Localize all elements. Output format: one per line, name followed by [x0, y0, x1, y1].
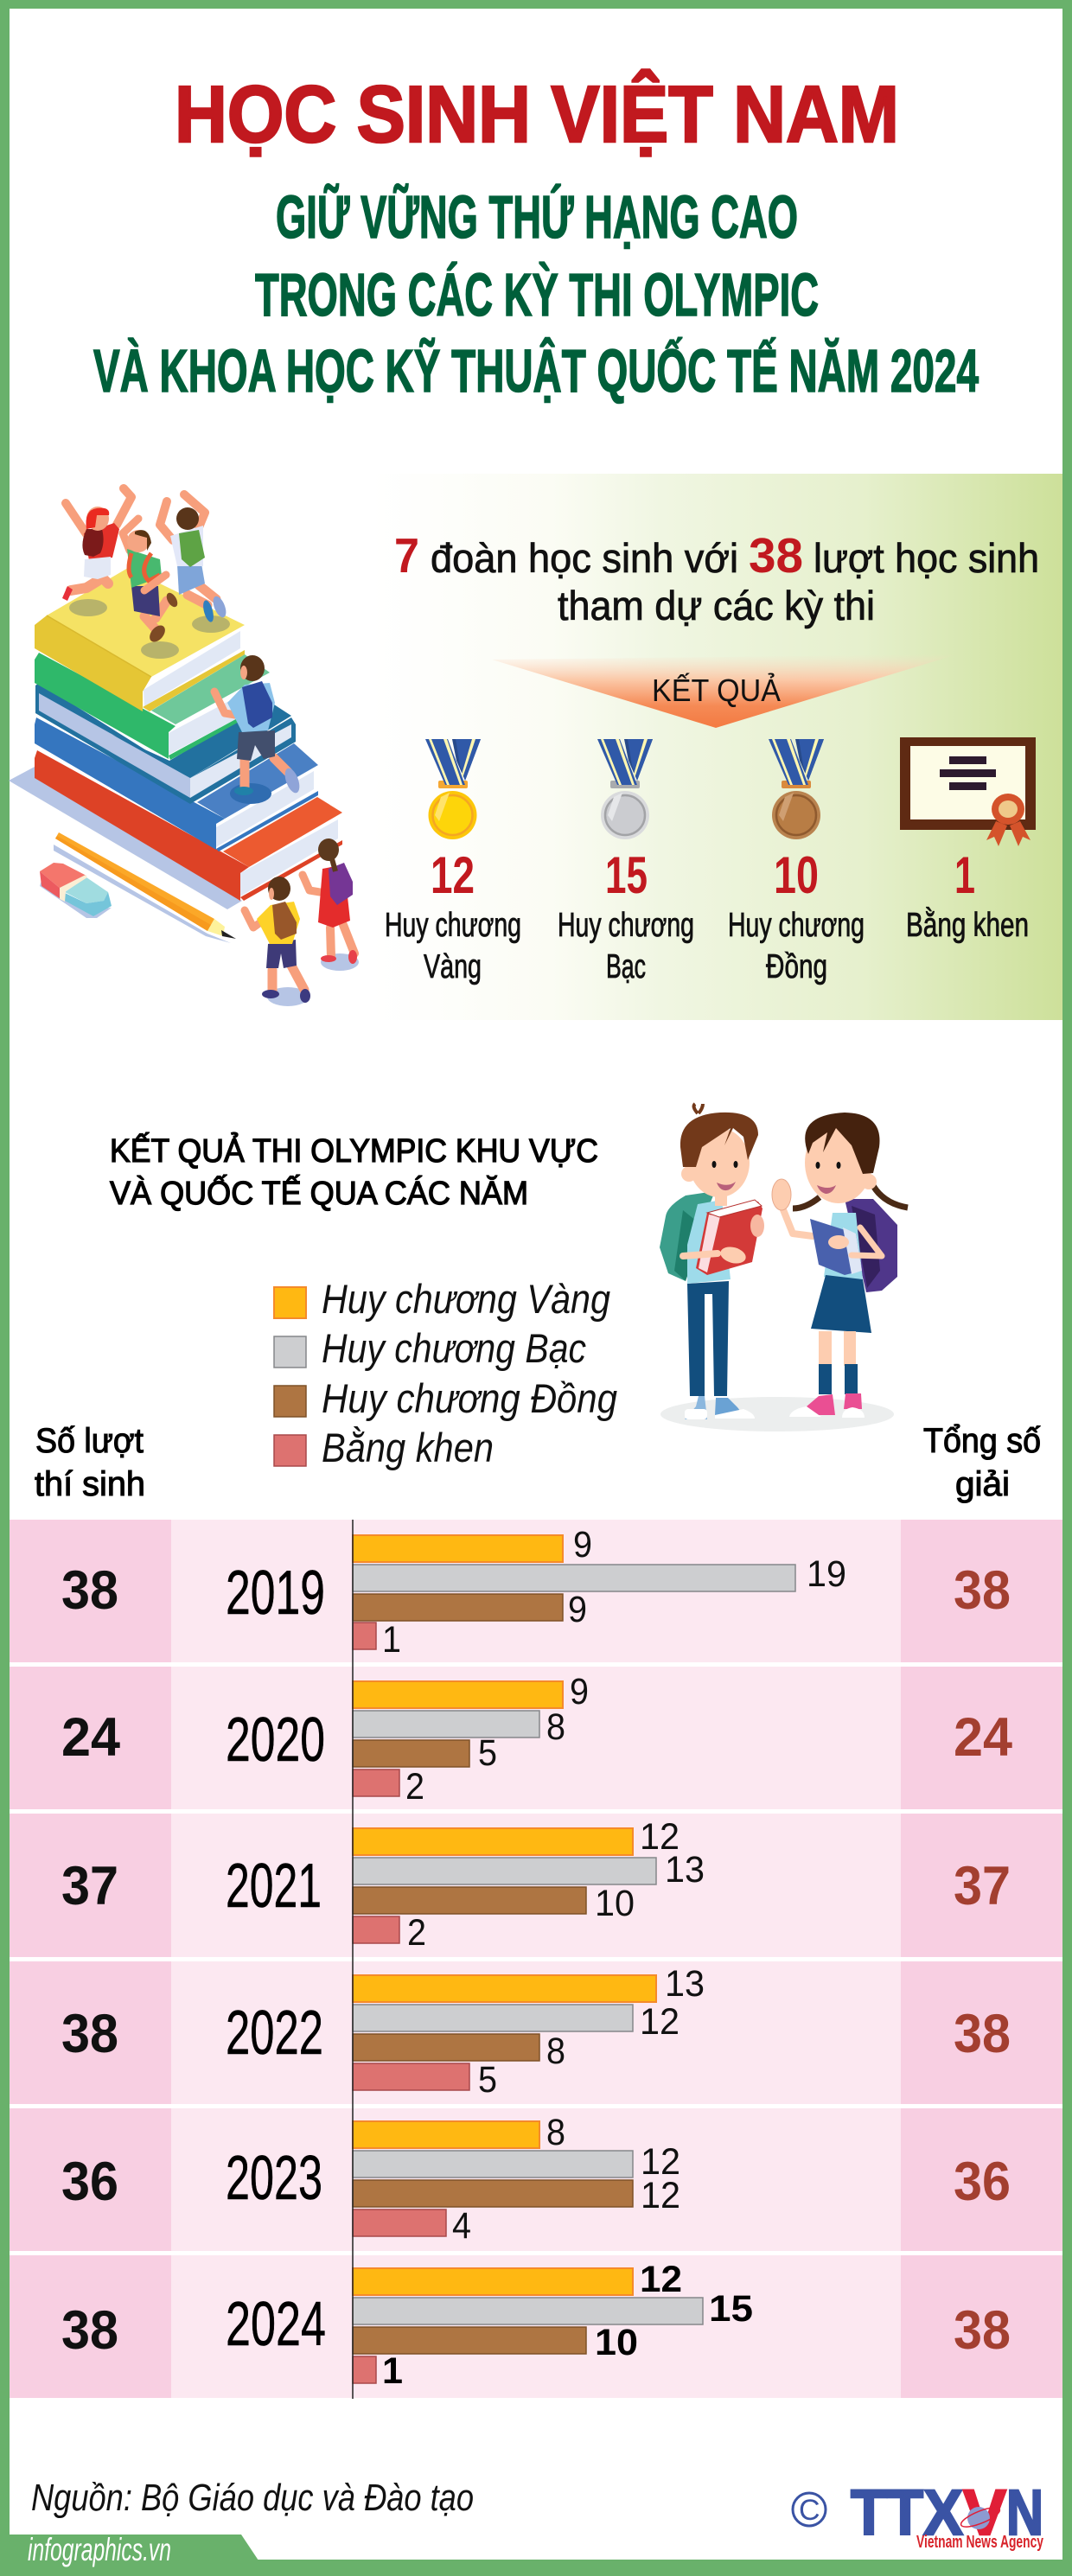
- legend: Huy chương Đồng: [322, 1375, 617, 1421]
- jump shadows: [69, 599, 230, 659]
- red book: [35, 750, 342, 901]
- column heading: participants: [35, 1422, 145, 1503]
- table row 2019: 9: [573, 1524, 592, 1565]
- table row 2024: 2024: [226, 2290, 326, 2359]
- column heading: total awards: Tổng số: [923, 1422, 1041, 1460]
- section heading: KẾT QUẢ THI OLYMPIC KHU VỰC: [110, 1132, 598, 1170]
- section heading: VÀ QUỐC TẾ QUA CÁC NĂM: [110, 1173, 528, 1212]
- table row 2024: 10: [595, 2322, 638, 2363]
- table row 2019: 19: [807, 1553, 846, 1595]
- table row 2021: [10, 1814, 1062, 1957]
- table row 2024: 12: [640, 2259, 682, 2300]
- copyright icon: [793, 2493, 826, 2527]
- gold count: 12: [431, 846, 475, 904]
- table row 2021: 13: [665, 1849, 705, 1891]
- shadow under books: [9, 767, 242, 909]
- gold count: Huy chương: [385, 907, 521, 944]
- illustration: two students talking: [660, 1104, 908, 1431]
- icon: certificate: [900, 737, 1036, 846]
- panel: results summary background: [372, 474, 1062, 1020]
- ground shadow: [660, 1397, 894, 1431]
- headline: delegations and students: 7: [394, 528, 419, 583]
- blue book: [35, 717, 318, 851]
- table row 2022: 38: [954, 2004, 1011, 2064]
- table row 2020: 8: [546, 1706, 565, 1748]
- section heading: [110, 1132, 598, 1212]
- table row 2019: 1: [382, 1619, 401, 1661]
- table row 2022: 2022: [226, 1999, 323, 2068]
- gold count: [385, 846, 521, 985]
- table row 2022: [10, 1961, 1062, 2104]
- headline: delegations and students: [394, 528, 1039, 628]
- subtitle: GIỮ VỮNG THỨ HẠNG CAO: [276, 183, 798, 251]
- table row 2019: 38: [61, 1560, 118, 1621]
- silver count: 15: [605, 846, 648, 904]
- website tab: infographics.vn: [28, 2532, 171, 2567]
- silver count: Bạc: [606, 948, 646, 985]
- table row 2024: 38: [61, 2300, 118, 2361]
- logo: TTXVN: V: [963, 2477, 1006, 2548]
- logo: TTXVN: TTX: [851, 2477, 963, 2548]
- illustration: book stack with students: [9, 488, 359, 1006]
- table row 2020: [10, 1667, 1062, 1809]
- table row 2022: 5: [478, 2059, 497, 2101]
- table row 2022: 12: [640, 2001, 680, 2043]
- table row 2020: 9: [570, 1671, 589, 1712]
- green book: [35, 653, 270, 760]
- results banner: [492, 654, 957, 728]
- table row 2020: 2: [405, 1766, 424, 1808]
- icon: bronze medal: [769, 739, 824, 839]
- headline: delegations and students: đoàn học sinh với: [431, 535, 738, 581]
- table row 2020: 2020: [226, 1706, 325, 1775]
- student in red dress: [303, 838, 359, 971]
- table row 2024: 1: [382, 2350, 403, 2392]
- table row 2021: 10: [595, 1883, 635, 1924]
- bronze count: 10: [774, 846, 819, 904]
- table row 2023: 12: [641, 2141, 680, 2183]
- logo: TTXVN: N: [1006, 2477, 1043, 2548]
- logo: TTXVN: [851, 2477, 1044, 2552]
- icon: gold medal: [425, 739, 481, 839]
- table row 2021: 37: [954, 1856, 1011, 1916]
- headline: delegations and students: tham dự các kỳ thi: [558, 583, 875, 628]
- legend: [274, 1276, 617, 1470]
- table row 2020: 24: [61, 1707, 120, 1768]
- table row 2023: 12: [641, 2175, 680, 2216]
- legend: Huy chương Bạc: [322, 1325, 586, 1371]
- column heading: participants: Số lượt: [35, 1422, 144, 1460]
- table row 2022: 8: [546, 2031, 565, 2072]
- certificate count: [906, 846, 1029, 944]
- table row 2021: 12: [640, 1816, 680, 1858]
- table row 2020: 24: [954, 1707, 1012, 1768]
- eraser: [40, 863, 112, 918]
- teal book: [35, 683, 296, 804]
- chart axis: [352, 1520, 354, 2399]
- legend: Bằng khen: [322, 1425, 494, 1470]
- table row 2019: 38: [954, 1560, 1011, 1621]
- table row 2022: 38: [61, 2004, 118, 2064]
- table row 2019: [10, 1520, 1062, 1662]
- column heading: participants: thí sinh: [35, 1465, 145, 1503]
- results banner: KẾT QUẢ: [652, 673, 781, 708]
- climbing student with blue backpack: [214, 655, 303, 804]
- column heading: total awards: giải: [955, 1465, 1010, 1503]
- headline: delegations and students: 38: [749, 528, 803, 583]
- table row 2023: 8: [546, 2112, 565, 2153]
- headline: delegations and students: lượt học sinh: [814, 535, 1039, 581]
- pencil: [54, 832, 236, 943]
- table row 2023: 36: [61, 2152, 118, 2212]
- source note: Nguồn: Bộ Giáo dục và Đào tạo: [31, 2477, 474, 2519]
- table row 2021: 37: [61, 1856, 118, 1916]
- silver count: [558, 846, 694, 985]
- student with brown backpack: [245, 877, 310, 1006]
- icon: silver medal: [597, 739, 653, 839]
- student with green backpack: [160, 494, 228, 623]
- certificate count: Bằng khen: [906, 907, 1029, 944]
- table row 2019: 9: [568, 1589, 587, 1630]
- yellow book: [35, 568, 245, 711]
- table row 2024: 15: [709, 2288, 753, 2330]
- table row 2021: 2: [407, 1912, 426, 1954]
- bronze count: Huy chương: [728, 907, 865, 944]
- bronze count: [728, 846, 865, 985]
- boy: [660, 1104, 764, 1419]
- certificate count: 1: [954, 846, 975, 904]
- column heading: total awards: [923, 1422, 1041, 1503]
- girl: [772, 1113, 908, 1418]
- table row 2023: 4: [452, 2205, 471, 2247]
- table row 2023: 2023: [226, 2144, 322, 2213]
- table row 2023: [10, 2108, 1062, 2251]
- subtitle: [93, 183, 979, 405]
- legend: Huy chương Vàng: [322, 1276, 610, 1322]
- student in green shirt: [123, 519, 180, 645]
- student in red shirt: [62, 488, 131, 601]
- bronze count: Đồng: [766, 948, 827, 985]
- gold count: Vàng: [424, 948, 482, 985]
- table row 2020: 5: [478, 1732, 497, 1774]
- title: HỌC SINH VIỆT NAM: [175, 69, 899, 159]
- copyright icon: C: [799, 2494, 820, 2527]
- table row 2024: 38: [954, 2300, 1011, 2361]
- table row 2021: 2021: [226, 1852, 322, 1921]
- table row 2024: [10, 2255, 1062, 2398]
- table row 2023: 36: [954, 2152, 1011, 2212]
- table row 2022: 13: [665, 1963, 705, 2005]
- table row 2019: 2019: [226, 1559, 325, 1628]
- silver count: Huy chương: [558, 907, 694, 944]
